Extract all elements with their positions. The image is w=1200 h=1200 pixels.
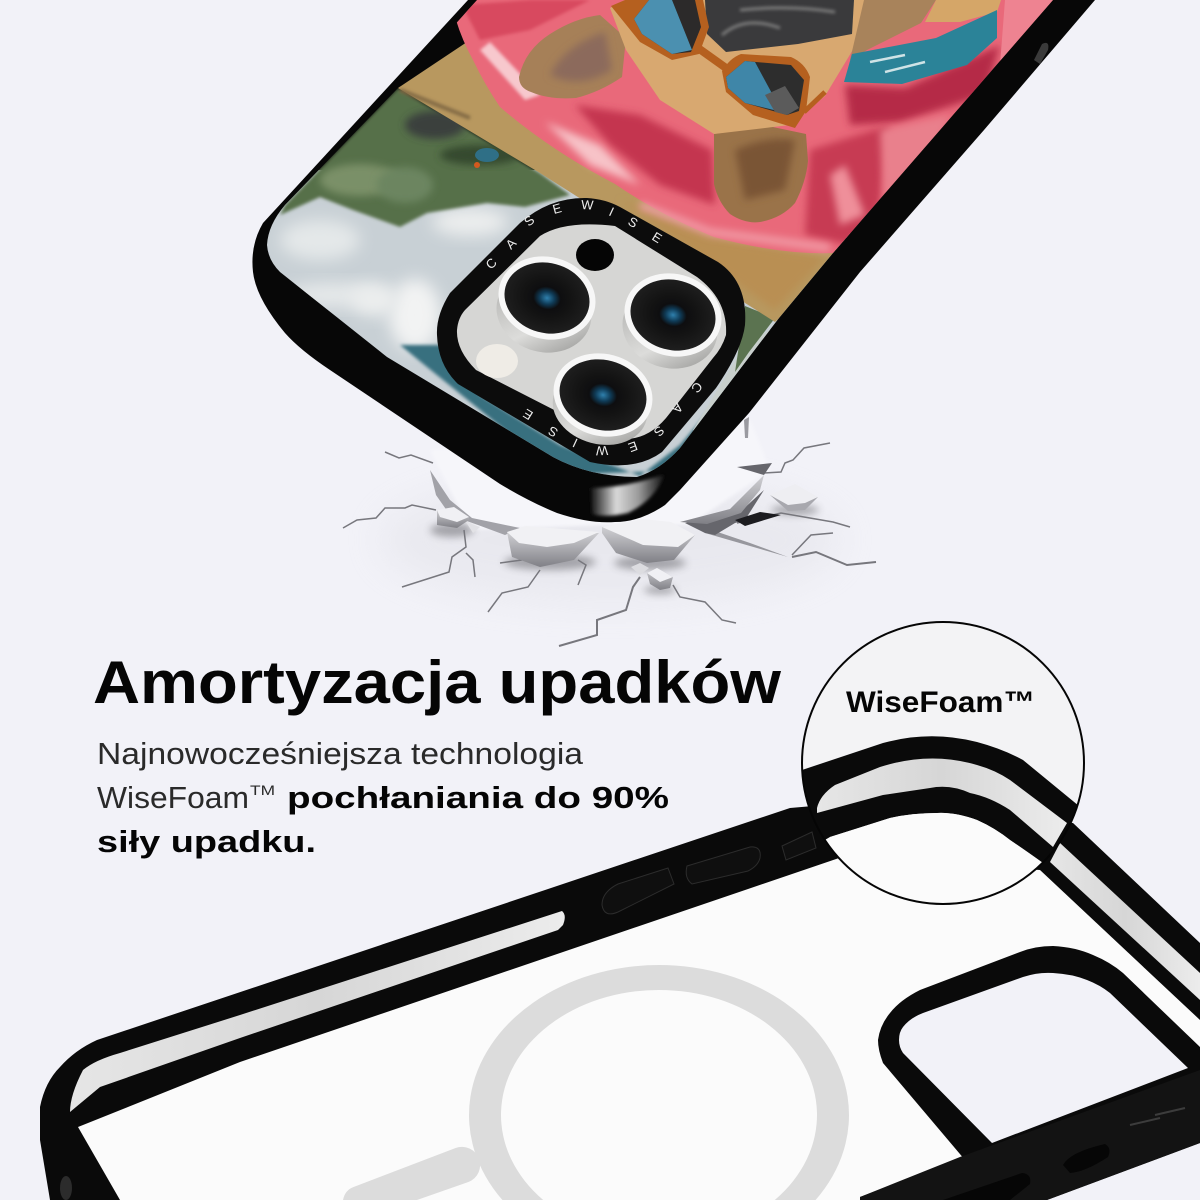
ports at the bottom edge xyxy=(60,1108,1185,1200)
body text: WiseFoam xyxy=(97,780,249,815)
magnifier label: WiseFoam™ xyxy=(846,686,1035,719)
bandana xyxy=(844,10,997,84)
MagSafe alignment bar xyxy=(343,1147,480,1200)
brand text top: CASEWISE xyxy=(483,197,665,272)
sand xyxy=(398,40,845,322)
body text: pochłaniania do 90% xyxy=(287,780,669,815)
black frame xyxy=(40,800,1200,1200)
clear back panel xyxy=(78,857,1200,1200)
sunglasses xyxy=(611,0,825,128)
pink inflatable ring xyxy=(456,0,1060,253)
camera cutout xyxy=(878,946,1200,1160)
case bumper xyxy=(252,0,1095,522)
lens two xyxy=(615,263,731,367)
printed artwork xyxy=(250,0,1060,490)
LiDAR dot xyxy=(576,239,614,271)
trees xyxy=(280,88,775,372)
MagSafe ring xyxy=(469,965,849,1200)
lower ear xyxy=(714,126,808,222)
magnifier outline xyxy=(802,622,1084,904)
clear gap along right side xyxy=(1050,843,1200,1000)
snout xyxy=(705,0,854,52)
bridge xyxy=(698,48,726,68)
camera island xyxy=(437,197,745,465)
bottom phone case, clear back with black frame xyxy=(40,800,1200,1200)
neck xyxy=(850,0,936,60)
head xyxy=(610,0,865,134)
lens three xyxy=(544,342,662,448)
rock fragments xyxy=(437,484,818,590)
lens barrels xyxy=(487,261,727,455)
right lens xyxy=(722,54,810,128)
sky with clouds xyxy=(250,170,850,490)
magnified case layers xyxy=(803,736,1077,862)
flash xyxy=(476,344,518,378)
crack: impact in the ground xyxy=(343,417,876,646)
top phone with printed case, falling on its corner xyxy=(250,0,1095,522)
lens one xyxy=(489,246,605,350)
heading: Amortyzacja upadków xyxy=(93,649,781,716)
side buttons xyxy=(602,832,816,914)
crack wedges and plate sides xyxy=(430,417,788,557)
body text: Najnowocześniejsza technologia xyxy=(97,736,584,771)
upper ear xyxy=(519,15,626,98)
left lens xyxy=(611,0,709,60)
silver back plate xyxy=(457,224,726,439)
power button xyxy=(1034,43,1048,64)
body text: TM xyxy=(250,782,275,798)
magnifier background xyxy=(802,622,1084,904)
island black ring xyxy=(437,198,745,465)
body text xyxy=(97,736,669,859)
bottom edge of frame xyxy=(860,1070,1200,1200)
brand text bottom: CASEWISE xyxy=(520,379,706,458)
corner highlight xyxy=(590,474,665,516)
body text: siły upadku. xyxy=(97,824,316,859)
clear gap along left side xyxy=(70,911,565,1112)
magnifier callout: WiseFoam xyxy=(790,622,1090,920)
dog wearing sunglasses xyxy=(519,0,1001,222)
